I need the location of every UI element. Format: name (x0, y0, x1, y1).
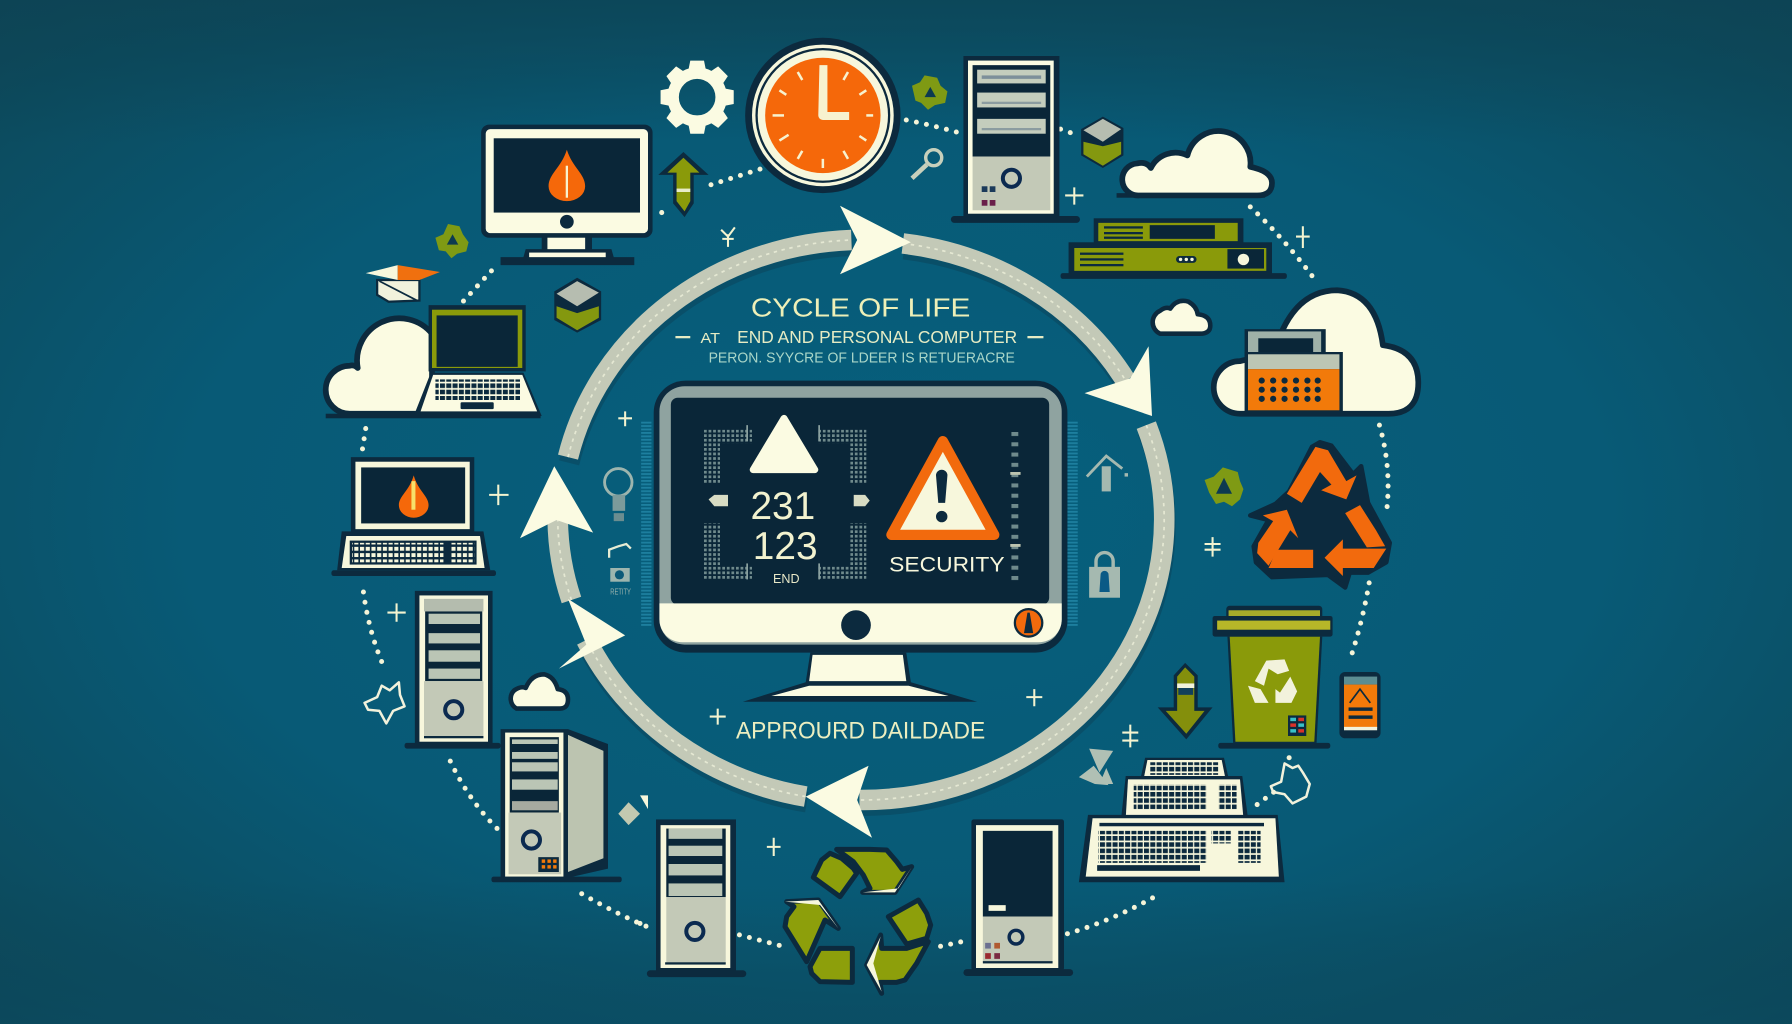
cycle ring with arrows (520, 206, 1165, 838)
title: CYCLE OF LIFE (751, 293, 970, 323)
dotted connectors (362, 120, 1388, 946)
icon: recycle outline left (365, 682, 405, 723)
sparkle crosses (387, 187, 1310, 856)
printer (1245, 329, 1343, 413)
icon: bulb (605, 469, 632, 521)
title block (675, 293, 1043, 366)
tagline: PERON. SYYCRE OF LDEER IS RETUERACRE (709, 350, 1015, 366)
icon: small device with label (609, 544, 631, 596)
icon: laptop and cloud (326, 305, 542, 418)
central monitor (641, 381, 1078, 702)
number 231: 231 (750, 485, 815, 528)
icon: tower 3D (491, 729, 622, 882)
dot matrix readout (704, 425, 1021, 582)
icon: down arrow (1158, 663, 1213, 739)
arrowhead: lower left (559, 599, 625, 669)
number 123: 123 (753, 525, 818, 568)
icon: desktop monitor (481, 125, 653, 265)
recycle mark (1248, 659, 1297, 703)
caption: APPROURD DAILDADE (736, 717, 985, 744)
alert dot (1015, 609, 1042, 637)
icon: keyboard stack (1079, 758, 1285, 882)
icon: fragment lower right (1079, 749, 1113, 785)
orange warning triangle (891, 441, 994, 535)
icon: gear (661, 61, 734, 134)
icon: drop (399, 475, 429, 518)
label SECURITY: SECURITY (889, 551, 1005, 576)
icon: olive box right (1081, 117, 1123, 168)
icon: small recycle leaf top (912, 75, 947, 110)
white warning triangle (753, 418, 815, 470)
icon: small cloud (1153, 301, 1210, 334)
arrowhead: bottom (806, 766, 872, 838)
label END: END (773, 572, 800, 586)
icon: small device with label: RETITY (610, 587, 631, 596)
icon: orange recycle symbol (1250, 442, 1390, 587)
icon: recycle outline lower right (1271, 763, 1310, 803)
icon: up arrow (658, 152, 709, 217)
icon: recycling bin (1213, 606, 1333, 749)
icon: olive box left (554, 278, 601, 333)
icon: graduation box (366, 265, 440, 302)
icon: diamond and corner (618, 795, 648, 825)
icon: cloud top right (1117, 131, 1272, 198)
laptop (326, 305, 542, 418)
icon: green server (1061, 218, 1287, 279)
arrowhead: right (1085, 346, 1152, 416)
camera (841, 610, 871, 640)
icon: lock (1089, 553, 1120, 598)
icon: clock (745, 38, 901, 193)
subtitle: END AND PERSONAL COMPUTER (737, 327, 1017, 347)
icon: tower bottom left (647, 819, 746, 977)
arrowhead: top (840, 206, 911, 274)
icon: tower top (951, 56, 1080, 223)
icon: house arrow (1087, 456, 1128, 491)
icon: phone (1339, 672, 1381, 738)
arrowhead: left (520, 466, 593, 538)
icon: cloud with printer (1214, 290, 1418, 414)
icon: tower bottom right (963, 819, 1073, 976)
icon: laptop left (331, 457, 496, 576)
subtitle: AT (701, 331, 720, 347)
icon: drop (549, 150, 585, 201)
cloud (326, 318, 432, 414)
icon: big green recycle symbol (785, 849, 931, 993)
icon: small recycle leaf right (1205, 467, 1243, 506)
stand (743, 653, 977, 702)
icon: magnifier (912, 150, 942, 178)
icon: cloud small lower left (511, 674, 568, 709)
icon: small recycle leaf (435, 224, 469, 258)
icon: tower left (405, 591, 501, 749)
